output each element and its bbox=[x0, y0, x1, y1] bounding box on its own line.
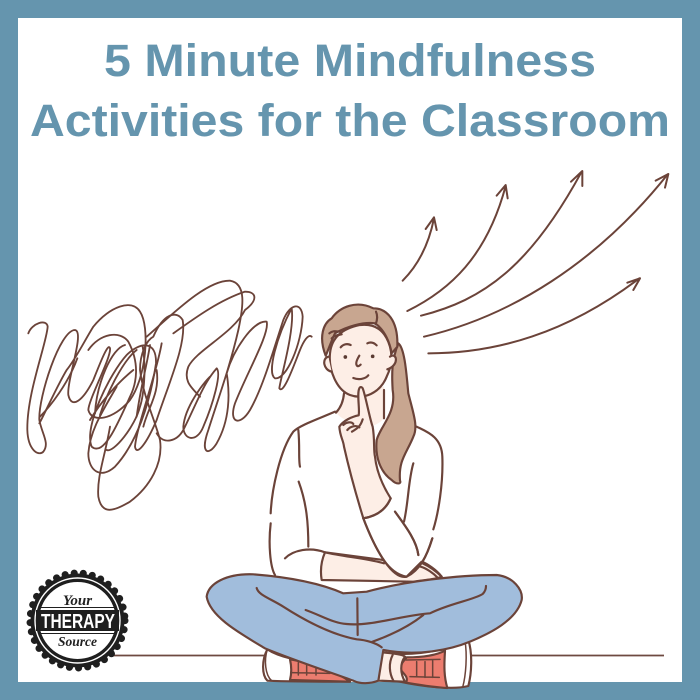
jeans bbox=[207, 574, 522, 683]
badge banner bbox=[36, 610, 119, 631]
title: Activities for the Classroom bbox=[30, 95, 670, 146]
badge word: Source: Source bbox=[58, 634, 97, 649]
illustration: crossed legs and shoes bbox=[207, 574, 522, 688]
eyes and brows bbox=[343, 355, 347, 359]
ground line bbox=[112, 654, 664, 656]
left shoe bbox=[263, 649, 350, 682]
illustration: woman thinking, upper body bbox=[270, 305, 442, 583]
arrow 2 bbox=[407, 185, 508, 311]
icon: tangled scribble bbox=[27, 281, 312, 510]
title bbox=[30, 35, 670, 146]
neck bbox=[336, 387, 385, 425]
jeans creases bbox=[257, 586, 486, 647]
arrow 3 bbox=[421, 171, 582, 316]
hair bbox=[322, 305, 397, 356]
badge word: THERAPY: THERAPY bbox=[41, 611, 116, 633]
arrow 1 bbox=[403, 217, 437, 281]
right shoe bbox=[378, 640, 471, 688]
raised arm and hand bbox=[339, 387, 391, 518]
badge scalloped edge bbox=[30, 573, 125, 668]
nose bbox=[356, 356, 361, 366]
ponytail bbox=[376, 343, 415, 483]
badge disc bbox=[30, 574, 124, 668]
arrow 5 bbox=[428, 278, 640, 353]
arrow 4 bbox=[424, 174, 668, 337]
logo: Your Therapy Source badge bbox=[30, 573, 125, 668]
icon: five thought arrows bbox=[403, 171, 668, 353]
badge word: Your: Your bbox=[63, 593, 92, 609]
lower arm and hand bbox=[321, 552, 442, 582]
ears bbox=[324, 356, 396, 372]
mouth bbox=[353, 375, 368, 379]
face bbox=[330, 325, 391, 397]
sweater bbox=[270, 412, 442, 583]
sock cuff bbox=[378, 652, 405, 682]
title: 5 Minute Mindfulness bbox=[104, 35, 596, 86]
